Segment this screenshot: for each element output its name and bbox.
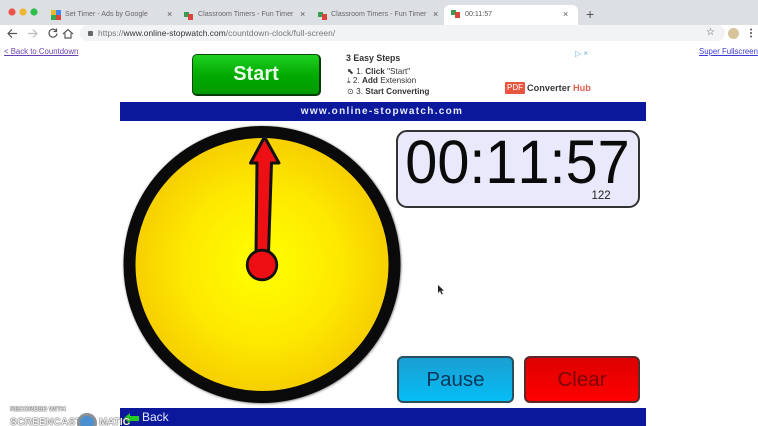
back to countdown link: < Back to Countdown (4, 47, 78, 56)
counter: 122 (592, 190, 611, 202)
clock face (130, 132, 394, 397)
step 2: ⤓ 2. Add Extension (347, 76, 416, 85)
start button (192, 54, 321, 96)
toolbar (0, 25, 758, 44)
start button: Start (233, 63, 279, 85)
ad heading: 3 Easy Steps (346, 53, 400, 63)
tab: Classroom Timers 1: Classroom Timers - Fun Timer (198, 10, 293, 18)
pause button: Pause (426, 368, 485, 391)
tab: Classroom Timers 2: Classroom Timers - Fun Timer (331, 10, 426, 18)
cursor (438, 285, 444, 294)
window controls (8, 8, 38, 16)
ad: 3 easy steps (346, 53, 429, 96)
clear button (524, 356, 640, 403)
address bar (80, 25, 725, 41)
tab: Classroom Timers 2 (318, 9, 438, 20)
logo text: Converter Hub (527, 83, 591, 93)
ad choices icon: ▷ × (575, 49, 588, 58)
tab: Set Timer: Set Timer - Ads by Google (65, 10, 148, 18)
step 1: ⬉ 1. Click "Start" (347, 67, 410, 76)
active tab: 00:11:57 (465, 10, 492, 18)
tab: Classroom Timers 2: × (433, 9, 438, 19)
tab: Classroom Timers 1: × (300, 9, 305, 19)
digital time display (396, 130, 640, 208)
step 3: ⊙ 3. Start Converting (347, 86, 429, 96)
tab: Set Timer: × (167, 9, 172, 19)
top blue banner: www.online-stopwatch.com (301, 106, 463, 117)
active tab: × (563, 9, 568, 19)
url: https://www.online-stopwatch.com/countdown-clock/full-screen/ (98, 28, 335, 38)
time readout: 00:11:57 (405, 128, 630, 196)
back arrow icon (124, 413, 139, 424)
browser tab strip (0, 0, 758, 25)
pdf converter hub logo (505, 82, 591, 94)
active tab (444, 5, 578, 25)
pdf badge (505, 82, 525, 94)
pdf badge: PDF (507, 83, 523, 92)
tab: Set Timer (51, 9, 172, 20)
recorded with text: RECORDED WITH (10, 406, 66, 413)
watermark logo (77, 413, 97, 426)
pause button (397, 356, 514, 403)
browser chrome (0, 0, 758, 44)
bottom blue banner (120, 408, 646, 426)
clock (122, 124, 403, 406)
tab: Classroom Timers 1 (184, 9, 305, 20)
clock shadow (124, 126, 401, 404)
super fullscreen link: Super Fullscreen (699, 47, 758, 56)
clear button: Clear (558, 368, 606, 391)
navigation icons (7, 28, 74, 39)
clock hand (247, 137, 279, 280)
top blue banner (120, 102, 646, 121)
screencast-o-matic watermark (10, 406, 130, 426)
back label: Back (142, 410, 169, 424)
star icon: ☆ (706, 27, 715, 38)
new tab button: + (586, 6, 594, 22)
profile avatar (728, 28, 739, 39)
menu dots (750, 28, 752, 38)
